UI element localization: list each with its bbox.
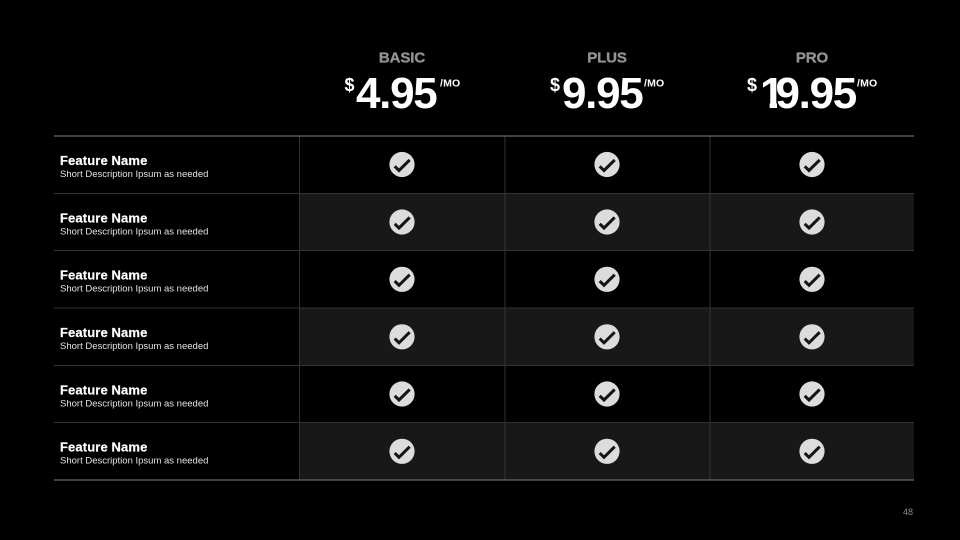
feature row 3: [60, 267, 825, 295]
pricing header: Basic: [344, 50, 460, 118]
alternating row background: row 6: [300, 423, 914, 480]
pricing header: Plus: $: [550, 75, 560, 95]
feature row 6: Feature Name: [60, 440, 147, 455]
feature row 5: [60, 381, 825, 409]
feature row 5: Feature Name: [60, 382, 147, 397]
feature row 4: Short Description Ipsum as needed: [60, 341, 208, 352]
feature row 5: Short Description Ipsum as needed: [60, 398, 208, 409]
pricing header: Plus: 9.95: [562, 69, 643, 118]
feature row 4: [60, 324, 825, 352]
pricing header: Pro: [747, 52, 877, 108]
feature row 6: Short Description Ipsum as needed: [60, 456, 208, 467]
pricing header: Basic: BASIC: [379, 50, 425, 67]
feature row 1: Feature Name: [60, 153, 147, 168]
feature row 3: Feature Name: [60, 268, 147, 283]
feature row 2: Short Description Ipsum as needed: [60, 226, 208, 237]
pricing header: Plus: /MO: [644, 78, 664, 90]
pricing header: Pro: /MO: [857, 78, 877, 90]
pricing header: Basic: 4.95: [356, 69, 437, 118]
page number: 48: [903, 507, 913, 517]
pricing header: Basic: $: [344, 75, 355, 95]
feature row 1: [60, 152, 825, 180]
pricing header: Pro: $: [747, 75, 757, 95]
feature row 2: Feature Name: [60, 210, 147, 225]
pricing header: Pro: 1: [760, 69, 784, 118]
feature row 1: Short Description Ipsum as needed: [60, 169, 208, 180]
pricing header: Pro: PRO: [796, 50, 829, 67]
alternating row background: row 2: [300, 194, 914, 250]
pricing header: Pro: 9.95: [776, 69, 857, 118]
pricing header: Plus: PLUS: [587, 50, 627, 67]
pricing header: Basic: /MO: [440, 78, 460, 90]
feature row 3: Short Description Ipsum as needed: [60, 284, 208, 295]
feature row 4: Feature Name: [60, 325, 147, 340]
feature row 2: [60, 209, 825, 237]
alternating row background: row 4: [300, 308, 914, 365]
pricing header: Plus: [550, 50, 664, 118]
feature row 6: [60, 439, 825, 467]
